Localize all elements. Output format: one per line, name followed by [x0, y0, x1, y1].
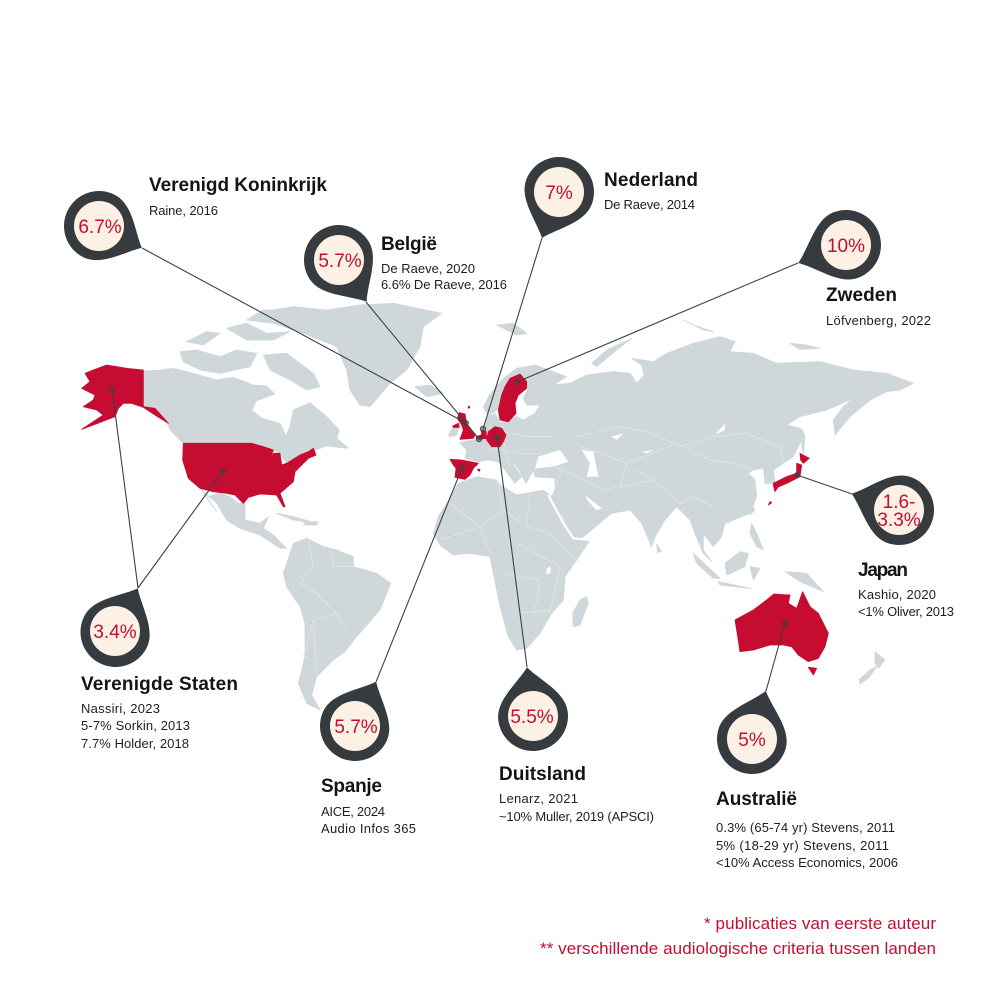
line: UK: [142, 248, 466, 423]
label: Australië: 0.3% (65-74 yr) Stevens, 2011: [716, 820, 895, 835]
pin: Japan: [840, 461, 943, 554]
map: Europe, Africa, Asia, Oceania: [433, 320, 913, 684]
label: Australië: [716, 789, 898, 870]
label: Australië: Australië: [716, 789, 797, 810]
label: Nederland: [604, 170, 698, 212]
footnotes: ** verschillende audiologische criteria tussen landen: [540, 939, 936, 958]
label: België: [381, 234, 507, 292]
line: Belgium: [366, 302, 479, 439]
label: Zweden: [826, 285, 931, 328]
country borders: [440, 427, 783, 620]
footnotes: * publicaties van eerste auteur: [704, 914, 936, 933]
line: Netherlands: [483, 238, 542, 429]
label: België: België: [381, 234, 437, 255]
pin: United Kingdom: [52, 179, 158, 279]
pin: Australia: 5%: [738, 730, 766, 751]
Africa: [433, 477, 590, 650]
Indonesia and New Guinea: [693, 552, 823, 592]
Alaska: [82, 365, 168, 429]
pin: Germany: 5.5%: [510, 707, 554, 728]
label: Spanje: Spanje: [321, 776, 382, 797]
label: Duitsland: ~10% Muller, 2019 (APSCI): [499, 809, 654, 824]
pin: Belgium: [291, 212, 396, 321]
Germany: [487, 427, 506, 447]
marker: Belgium: [476, 436, 482, 442]
Sri Lanka, Taiwan, Hainan, Philippines, Sakhalin: [657, 428, 805, 552]
pin: Japan: 1.6-: [883, 492, 915, 513]
label: België: De Raeve, 2020: [381, 261, 475, 276]
label: Verenigde Staten: Nassiri, 2023: [81, 701, 160, 716]
pin: Netherlands: 7%: [545, 183, 573, 204]
marker: Spain: [460, 466, 464, 470]
Canada: [143, 368, 348, 463]
label: Japan: Kashio, 2020: [858, 587, 936, 602]
Mexico and Central America: [200, 488, 287, 548]
label: Duitsland: [499, 764, 654, 824]
label: Japan: [858, 560, 954, 619]
label: Verenigde Staten: 5-7% Sorkin, 2013: [81, 718, 190, 733]
Greenland: [263, 303, 442, 407]
pin: Spain: [308, 667, 408, 773]
label: Zweden: Löfvenberg, 2022: [826, 313, 931, 328]
New Zealand: [859, 652, 885, 684]
marker: Japan: [794, 472, 800, 478]
world map: [82, 303, 913, 710]
label: Australië: 5% (18-29 yr) Stevens, 2011: [716, 838, 889, 853]
pin: Netherlands: [509, 147, 604, 250]
label: Verenigd Koninkrijk: Raine, 2016: [149, 203, 218, 218]
label: België: 6.6% De Raeve, 2016: [381, 277, 507, 292]
line: Germany: [497, 437, 527, 667]
label: Verenigd Koninkrijk: [149, 175, 327, 218]
Sweden: [498, 374, 527, 422]
Ireland: [448, 427, 458, 437]
Caribbean islands: [277, 513, 318, 525]
Netherlands and Belgium: [476, 430, 487, 439]
label: Verenigde Staten: 7.7% Holder, 2018: [81, 736, 189, 751]
marker: Germany: [494, 434, 500, 440]
map: the Americas: [82, 303, 443, 710]
label: Zweden: Zweden: [826, 285, 897, 306]
marker: UK: [464, 420, 468, 426]
line: Spain: [376, 468, 462, 682]
pin: United States: [68, 572, 169, 679]
Iceland: [415, 385, 443, 397]
pin: Belgium: 5.7%: [318, 251, 362, 272]
line: Australia: [766, 623, 785, 691]
Eurasia: [460, 337, 913, 562]
label: Verenigde Staten: [81, 674, 238, 751]
pin: Spain: 5.7%: [334, 717, 378, 738]
line: Sweden: [517, 263, 798, 382]
label: Spanje: [321, 776, 416, 836]
label: Australië: <10% Access Economics, 2006: [716, 855, 898, 870]
Madagascar: [573, 597, 588, 627]
label: Verenigd Koninkrijk: Verenigd Koninkrijk: [149, 175, 327, 196]
label: Nederland: De Raeve, 2014: [604, 197, 695, 212]
label: Duitsland: Lenarz, 2021: [499, 791, 578, 806]
inland waters: [535, 423, 725, 574]
marker: Australia: [782, 620, 788, 626]
pin: United States: 3.4%: [93, 622, 137, 643]
Svalbard and Novaya Zemlya: [497, 320, 820, 367]
connector lines: [112, 238, 852, 691]
line: Japan: [797, 475, 852, 494]
pin: Germany: [492, 663, 572, 755]
Australia: [735, 592, 828, 675]
Spain: [450, 459, 480, 479]
line: Alaska: [112, 389, 138, 588]
line: USA: [138, 471, 223, 588]
label: Duitsland: Duitsland: [499, 764, 586, 785]
South America borders: [300, 538, 353, 677]
contiguous United States: [183, 443, 316, 507]
label: Japan: Japan: [858, 560, 908, 581]
label: Spanje: AICE, 2024: [321, 804, 385, 819]
label: Nederland: Nederland: [604, 170, 698, 191]
marker: Netherlands: [480, 426, 486, 432]
Red Sea and Gulf of Aden: [548, 495, 590, 540]
United Kingdom: [453, 406, 475, 439]
Japan: [768, 453, 809, 505]
label: Japan: <1% Oliver, 2013: [858, 604, 954, 619]
location markers: [110, 380, 800, 626]
marker: Sweden: [514, 380, 520, 384]
marker: Alaska: [110, 386, 114, 392]
Arctic islands: [180, 310, 320, 390]
label: Spanje: Audio Infos 365: [321, 821, 416, 836]
footnotes: [540, 914, 936, 958]
marker: USA: [220, 468, 226, 474]
South America: [283, 538, 391, 710]
pin: Sweden: 10%: [827, 236, 865, 257]
pin: Australia: [709, 681, 799, 782]
pin: United Kingdom: 6.7%: [78, 217, 122, 238]
pin: Sweden: [786, 200, 891, 296]
label: Verenigde Staten: Verenigde Staten: [81, 674, 238, 695]
pin: Japan: 3.3%: [877, 510, 921, 531]
